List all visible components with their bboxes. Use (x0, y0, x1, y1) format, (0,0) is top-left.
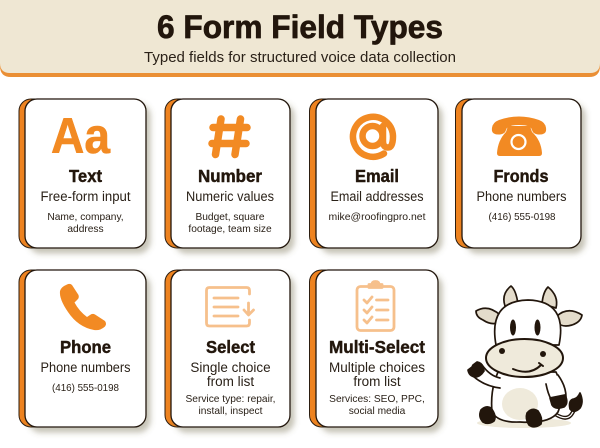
example: footage, team size (188, 224, 272, 235)
example: mike@roofingpro.net (328, 212, 426, 223)
icon: clipboard checklist (357, 282, 394, 330)
icon: at sign (353, 117, 393, 157)
heading: Select: Select (206, 337, 255, 357)
heading: Fronds: Fronds (494, 166, 549, 186)
illustration: waving cow mascot (468, 286, 582, 428)
description: Email addresses (330, 189, 424, 204)
panel: email field (310, 99, 438, 248)
example: (416) 555-0198 (488, 212, 556, 223)
description: Multiple choices (329, 360, 425, 375)
subtitle: Typed fields for structured voice data collection (144, 49, 456, 66)
icon: Aa: Aa (51, 108, 111, 164)
example: social media (349, 406, 406, 417)
panel: phone field (19, 270, 146, 427)
description: Phone numbers (40, 360, 131, 375)
description: from list (207, 374, 254, 389)
description: from list (353, 374, 401, 389)
title: 6 Form Field Types (157, 9, 443, 45)
description: Phone numbers (476, 189, 567, 204)
description: Free-form input (40, 189, 131, 204)
panel: multi-select field (310, 270, 438, 427)
panel: fronds field (456, 99, 581, 248)
description: Numeric values (186, 189, 274, 204)
header banner (0, 0, 600, 77)
panel: select field (165, 270, 290, 427)
example: (416) 555-0198 (52, 383, 119, 394)
example: Name, company, (47, 212, 124, 223)
heading: Number: Number (198, 166, 262, 186)
heading: Email: Email (355, 166, 399, 186)
example: address (67, 224, 104, 235)
example: Budget, square (195, 212, 265, 223)
heading: Multi-Select: Multi-Select (329, 337, 425, 357)
icon: handset (60, 284, 106, 330)
panel: number field (165, 99, 290, 248)
example: install, inspect (198, 406, 263, 417)
heading: Text: Text (69, 166, 102, 186)
icon: hash (212, 119, 247, 154)
heading: Phone: Phone (60, 337, 111, 357)
example: Service type: repair, (185, 394, 276, 405)
panel: text field (19, 99, 146, 248)
description: Single choice (190, 360, 271, 375)
icon: list with down arrow (206, 288, 254, 326)
icon: telephone (492, 116, 546, 156)
example: Services: SEO, PPC, (329, 394, 425, 405)
